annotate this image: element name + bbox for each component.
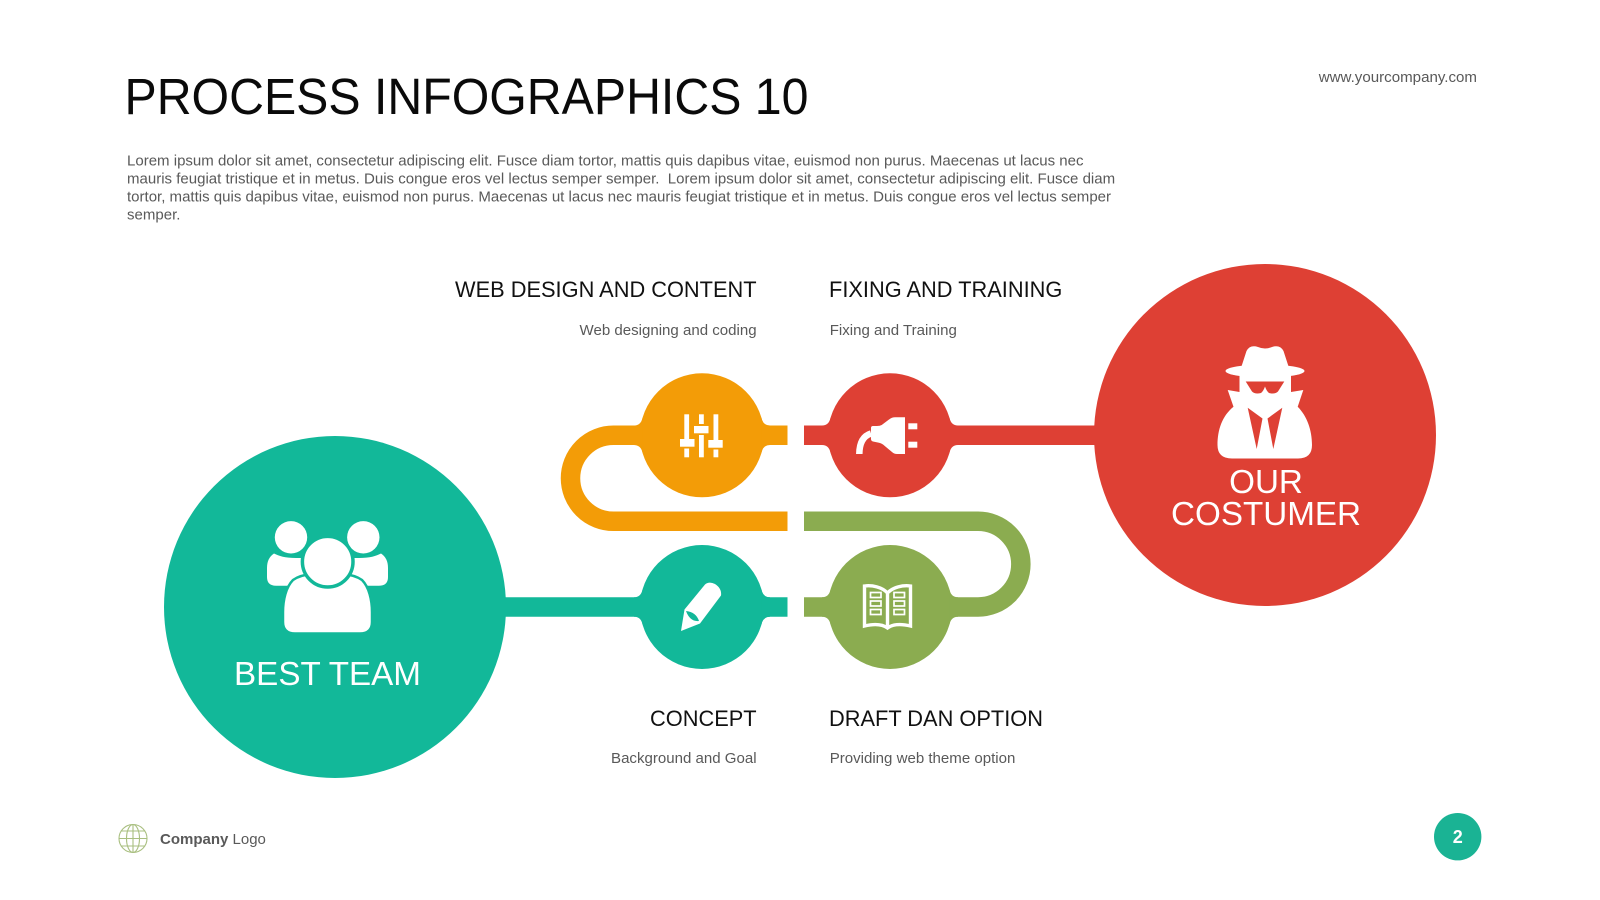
label block: draft dan option: Providing web theme option [830,750,1015,767]
intro text block: semper. [127,206,180,224]
company logo text: Company Logo [160,831,266,848]
label block: fixing and training: Fixing and Training [830,322,957,339]
label block: fixing and training [829,277,1062,339]
icon: sliders [680,414,723,457]
label: our costumer: OUR [1229,464,1303,501]
node: fixing and training [822,373,958,497]
intro text block: tortor, mattis quis dapibus vitae, euismod non purus. Maecenas ut lacus nec mauris feugiat tristique et in metus. Duis congue eros vel lectus semper [127,188,1111,206]
label: our costumer: COSTUMER [1171,496,1361,533]
label block: fixing and training: FIXING AND TRAINING [829,277,1062,302]
label block: web design and content: WEB DESIGN AND CONTENT [455,277,757,302]
intro text block: Lorem ipsum dolor sit amet, consectetur adipiscing elit. Fusce diam tortor, mattis quis dapibus vitae, euismod non purus. Maecenas ut lacus nec [127,152,1084,170]
icon: pencil [681,583,721,631]
label block: concept [611,706,757,767]
icon: detective [1218,346,1312,458]
icon: globe logo [119,824,147,852]
label block: concept: Background and Goal [611,750,757,767]
page number badge [1434,813,1481,860]
icon: open book [864,586,910,628]
label block: draft dan option [829,706,1043,767]
title: PROCESS INFOGRAPHICS 10 [124,68,808,125]
website url: www.yourcompany.com [1318,69,1477,86]
connector: teal line [500,597,788,617]
label: best team: BEST TEAM [234,656,421,693]
label block: draft dan option: DRAFT DAN OPTION [829,706,1043,731]
connector: orange loop [570,435,788,521]
node: concept [634,545,770,669]
panel: our costumer circle [1094,264,1436,606]
label block: concept: CONCEPT [650,706,757,731]
page number badge: 2 [1453,827,1463,847]
connector: green loop [804,521,1021,607]
panel: best team circle [164,436,506,778]
node: draft [822,545,958,669]
label block: web design and content [455,277,757,339]
icon: plug [859,417,917,454]
icon: team of people [267,521,388,634]
connector: red line [804,426,1100,445]
label block: web design and content: Web designing and coding [580,322,757,339]
node: web design [634,373,770,497]
intro text block: mauris feugiat tristique et in metus. Duis congue eros vel lectus semper semper. Lorem ipsum dolor sit amet, consectetur adipiscing elit. Fusce diam [127,170,1115,188]
